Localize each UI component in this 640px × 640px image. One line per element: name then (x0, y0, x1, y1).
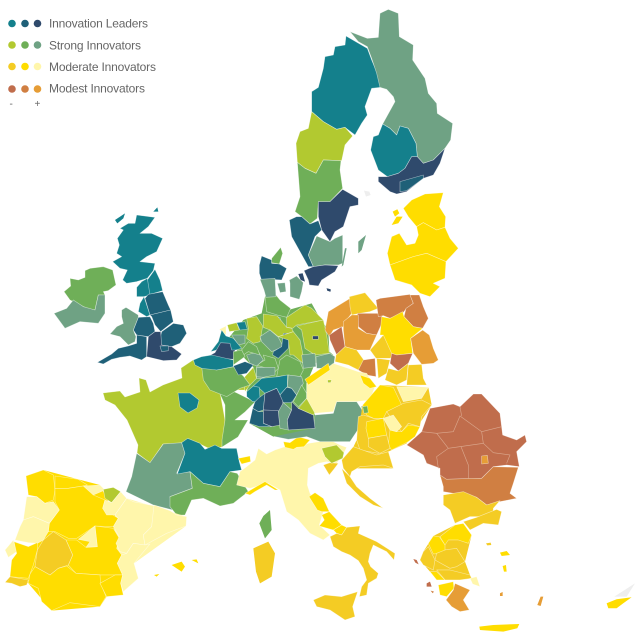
legend row: Strong Innovators: Strong Innovators (49, 38, 141, 52)
legend scale minus: - (10, 99, 13, 110)
Slovakia, Hungary and Croatia (342, 385, 432, 508)
Romania (407, 394, 527, 480)
Ireland (54, 267, 116, 328)
Denmark (259, 247, 330, 299)
legend row: Strong Innovators (8, 38, 141, 52)
United Kingdom (97, 207, 187, 364)
Poland (325, 293, 396, 378)
Greece and Cyprus (413, 509, 635, 632)
legend row: Innovation Leaders: Innovation Leaders (49, 16, 148, 30)
Spain (10, 470, 198, 611)
France (103, 360, 255, 515)
Germany south and centre (228, 295, 333, 437)
Bulgaria (440, 467, 518, 523)
legend row: Modest Innovators: Modest Innovators (49, 82, 145, 96)
legend (8, 16, 156, 110)
Sweden (289, 36, 381, 292)
Finland (350, 9, 453, 197)
Czechia (305, 363, 377, 413)
legend scale plus: + (34, 99, 40, 110)
Austria (273, 402, 367, 442)
Poland east (376, 294, 438, 385)
Baltic states (387, 193, 458, 297)
Portugal (5, 497, 59, 587)
Germany north (247, 295, 335, 368)
Belgium and Netherlands (193, 322, 260, 397)
Italy (237, 437, 395, 620)
legend row: Moderate Innovators: Moderate Innovators (49, 60, 156, 74)
Romania internal region borders (422, 407, 510, 478)
Slovenia and Istria (322, 445, 344, 475)
